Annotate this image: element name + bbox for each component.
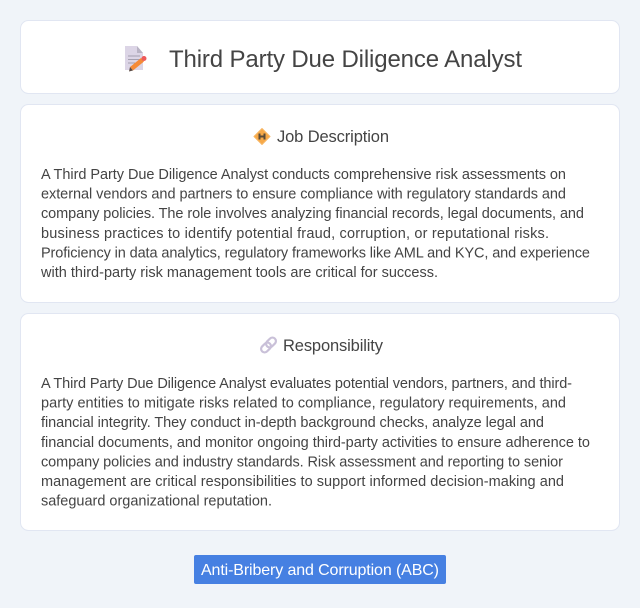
text block: responsibility: financial documents, and monitor ongoing third-party activities to ensure adherence to bbox=[41, 435, 590, 451]
text block: job description: business practices to identify potential fraud, corruption, or reputational risks. bbox=[41, 226, 549, 242]
panel: responsibility bbox=[20, 314, 620, 530]
tag: Anti-Bribery and Corruption bbox=[194, 555, 446, 584]
heading: job description: Job Description bbox=[277, 128, 389, 146]
text block: job description bbox=[40, 167, 590, 281]
text block: responsibility bbox=[41, 376, 590, 510]
icon: diamond sign bbox=[254, 128, 270, 144]
panel: title bbox=[20, 20, 620, 94]
text block: responsibility: party entities to mitigate risks related to compliance, regulatory requirements, and bbox=[41, 396, 566, 412]
heading: title: Third Party Due Diligence Analyst bbox=[169, 46, 522, 73]
tag: Anti-Bribery and Corruption: Anti-Bribery and Corruption (ABC) bbox=[201, 562, 439, 579]
text block: job description: with third-party risk management tools are critical for success. bbox=[40, 265, 438, 281]
text block: responsibility: financial integrity. They conduct in-depth background checks, analyze legal and bbox=[41, 415, 544, 431]
icon: chain link bbox=[260, 336, 277, 354]
text block: job description: company policies. The role involves analyzing financial records, legal documents, and bbox=[41, 206, 584, 222]
text block: responsibility: company policies and industry standards. Risk assessment and reporting to senior bbox=[41, 454, 563, 470]
text block: responsibility: A Third Party Due Diligence Analyst evaluates potential vendors, partners, and third- bbox=[41, 376, 572, 392]
text block: responsibility: safeguard organizational reputation. bbox=[41, 494, 272, 510]
heading: responsibility: Responsibility bbox=[283, 337, 384, 355]
panel: job description bbox=[20, 104, 620, 302]
text block: job description: Proficiency in data analytics, regulatory frameworks like AML and KYC, and experience bbox=[41, 245, 590, 261]
text block: job description: external vendors and partners to ensure compliance with regulatory standards and bbox=[41, 187, 566, 203]
text block: responsibility: management are critical responsibilities to support informed decision-making and bbox=[41, 474, 564, 490]
icon: document with pencil bbox=[125, 46, 146, 72]
text block: job description: A Third Party Due Diligence Analyst conducts comprehensive risk assessments on bbox=[41, 167, 566, 183]
